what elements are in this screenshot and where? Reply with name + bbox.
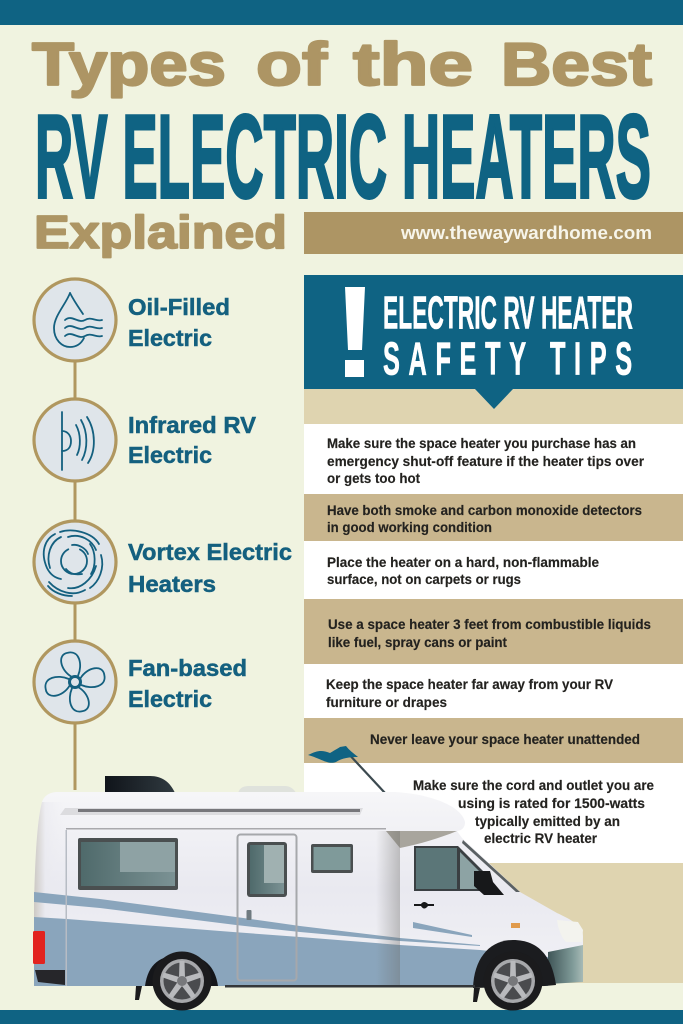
headlight [557,920,583,942]
tip 7: typically emitted by an [475,814,620,829]
tip 5 [326,677,613,710]
door handle [414,902,434,908]
blue lower panel [34,917,548,986]
underbody trim [225,985,475,988]
rear wheel [152,952,212,1010]
antenna flag [308,746,385,793]
tip 4: Use a space heater 3 feet from combustible liquids [328,617,651,632]
blue side stripe [34,892,480,946]
label: Vortex Electric [128,539,292,565]
title line: Explained: Explained [34,206,287,258]
safety tips header: SAFETY TIPS [383,332,632,384]
tip 1 [327,436,645,486]
rear shading [34,802,66,984]
heater type: fan-based [34,641,247,723]
tip 2 [327,503,642,535]
icon: exclamation mark [345,287,365,377]
heater type: oil-filled [34,279,230,361]
label: Infrared RV [128,412,257,438]
tip 7 [413,778,654,846]
front wheel [484,952,542,1010]
icon: vortex swirl [34,521,116,603]
title line: Types of the Best: the [353,31,473,98]
cab window and windscreen [414,840,520,892]
tip 2: in good working condition [327,520,492,535]
upper trim line [66,828,386,830]
tip 2: Have both smoke and carbon monoxide detectors [327,503,642,518]
cab stripe [413,922,472,937]
side mirror [474,871,504,895]
label: Heaters [128,571,216,597]
title line: Types of the Best: of [256,31,328,98]
front wheel arch [473,940,556,988]
front mudflap [473,988,480,1002]
title line: Types of the Best: Types [32,31,226,98]
label [128,655,247,712]
website banner: www.thewaywardhome.com [400,223,652,243]
rear window [78,838,178,890]
label [128,539,292,597]
cab seam shading [376,831,400,986]
pointer [475,389,513,409]
cab-over underside [386,831,457,848]
website banner [304,212,683,254]
RV illustration [33,746,583,1010]
tip 1: Make sure the space heater you purchase has an [327,436,636,451]
awning rail [60,808,363,815]
top bar [0,0,683,25]
title line: Types of the Best: Best [501,31,652,98]
entry door [238,834,296,980]
rear panel seam [66,830,67,986]
rear bumper [35,970,65,985]
label: Electric [128,442,212,468]
bottom bar [0,1010,683,1024]
rear wheel arch [145,955,218,986]
label [128,412,257,468]
motorhome body [34,792,583,986]
label: Electric [128,325,212,351]
safety tips header [304,275,683,409]
tip 3 [327,555,599,587]
side window [311,844,353,873]
panel backgrounds [304,389,683,983]
label [128,294,230,351]
title line: Types of the Best [32,31,652,98]
timeline connector [74,360,76,790]
tip 5: furniture or drapes [326,695,447,710]
title [32,31,652,258]
tip 4: like fuel, spray cans or paint [328,635,507,650]
roof air conditioner [105,776,175,793]
tip 4 [328,617,651,650]
rear mudflap [135,986,142,1000]
icon: oil drop [34,279,116,361]
tip 5: Keep the space heater far away from your RV [326,677,613,692]
label: Oil-Filled [128,294,230,320]
tip 1: or gets too hot [327,471,420,486]
tip 7: Make sure the cord and outlet you are [413,778,654,793]
indicator light [511,923,520,928]
tip 1: emergency shut-off feature if the heater tips over [327,454,645,469]
front bumper [548,945,583,984]
heater type: infrared [34,399,257,481]
tip 3: Place the heater on a hard, non-flammable [327,555,599,570]
tip 7: using is rated for 1500-watts [458,796,645,811]
heater type: vortex [34,521,292,603]
icon: infrared waves [34,399,116,481]
roof vent [238,786,296,793]
tip 3: surface, not on carpets or rugs [327,572,521,587]
tip 7: electric RV heater [484,831,598,846]
safety tips panel [304,275,683,983]
label: Fan-based [128,655,247,681]
label: Electric [128,686,212,712]
icon: fan [34,641,116,723]
tail light [33,931,45,964]
tip 6: Never leave your space heater unattended [370,732,640,747]
